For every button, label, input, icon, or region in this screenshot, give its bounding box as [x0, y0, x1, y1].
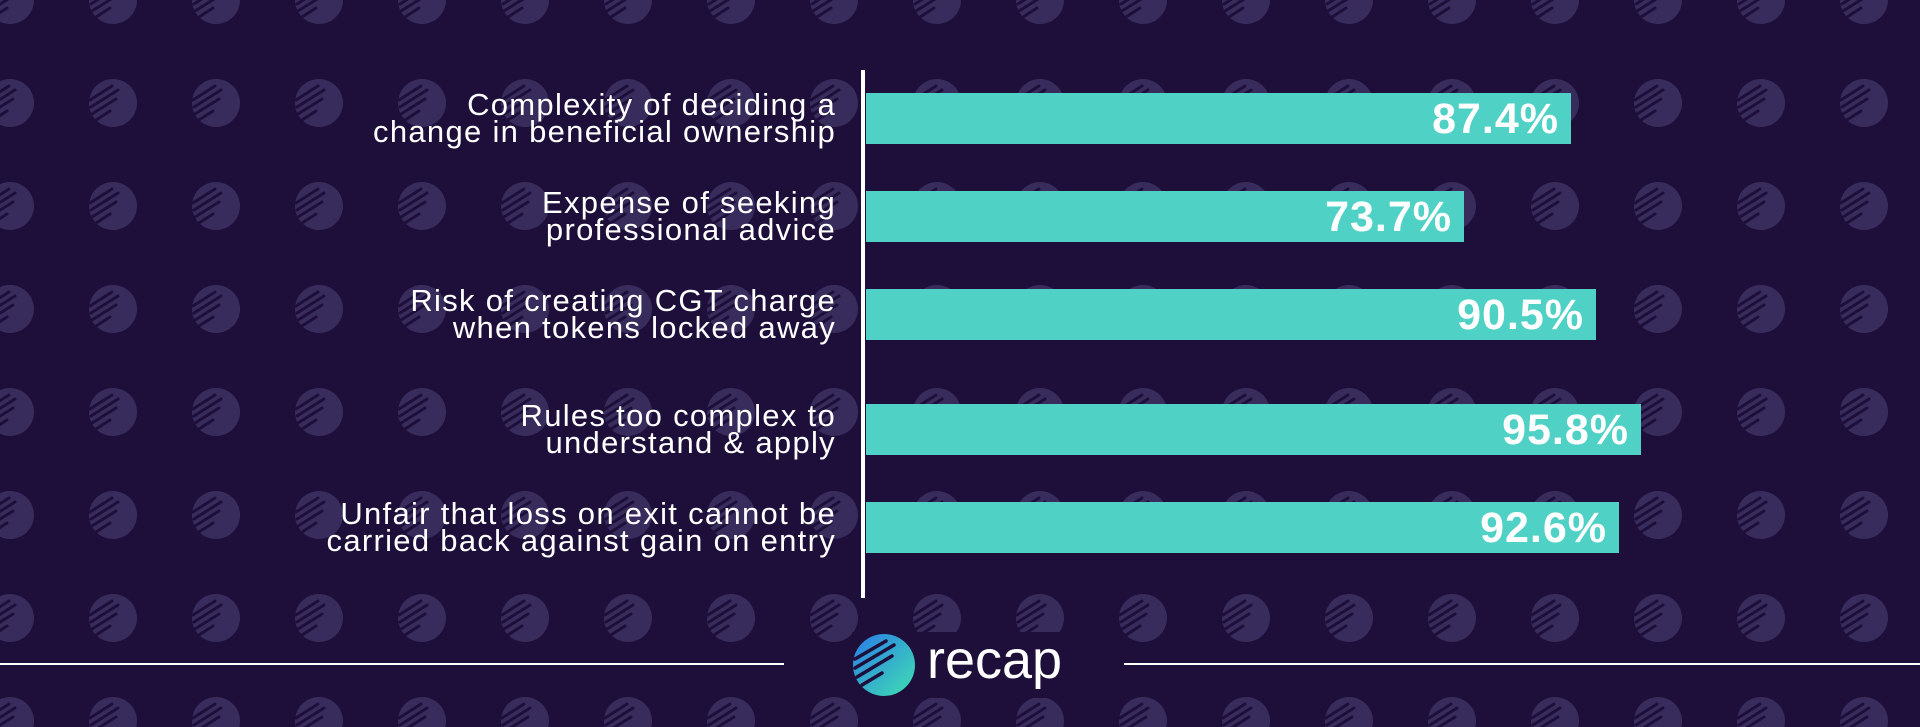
axis line: [861, 70, 865, 598]
label 1: Complexity of deciding a: [467, 87, 836, 122]
bar 2: 73.7%: [1325, 193, 1452, 241]
bar 3: 90.5%: [1457, 291, 1584, 339]
label 2: professional advice: [546, 212, 836, 247]
bar 3: [866, 289, 1596, 340]
bar 5: 92.6%: [1480, 504, 1607, 552]
bar 4: [866, 404, 1641, 455]
logo text: recap: [927, 630, 1062, 690]
footer lines: [0, 663, 784, 665]
label 4: understand & apply: [545, 425, 836, 460]
label 2: [542, 185, 836, 247]
bar 5: [866, 502, 1619, 553]
label 5: carried back against gain on entry: [327, 523, 836, 558]
icon: logo circle: [853, 634, 915, 696]
label 5: Unfair that loss on exit cannot be: [340, 496, 836, 531]
label 3: Risk of creating CGT charge: [410, 283, 836, 318]
bar 1: 87.4%: [1432, 95, 1559, 143]
logo: [852, 632, 1072, 698]
label 4: Rules too complex to: [521, 398, 836, 433]
bar 2: [866, 191, 1464, 242]
label 1: change in beneficial ownership: [373, 114, 836, 149]
label 4: [521, 398, 836, 460]
label 2: Expense of seeking: [542, 185, 836, 220]
bar 1: [866, 93, 1571, 144]
bar 4: 95.8%: [1502, 406, 1629, 454]
label 3: when tokens locked away: [453, 310, 836, 345]
label 5: [327, 496, 836, 558]
label 1: [373, 87, 836, 149]
label 3: [410, 283, 836, 345]
